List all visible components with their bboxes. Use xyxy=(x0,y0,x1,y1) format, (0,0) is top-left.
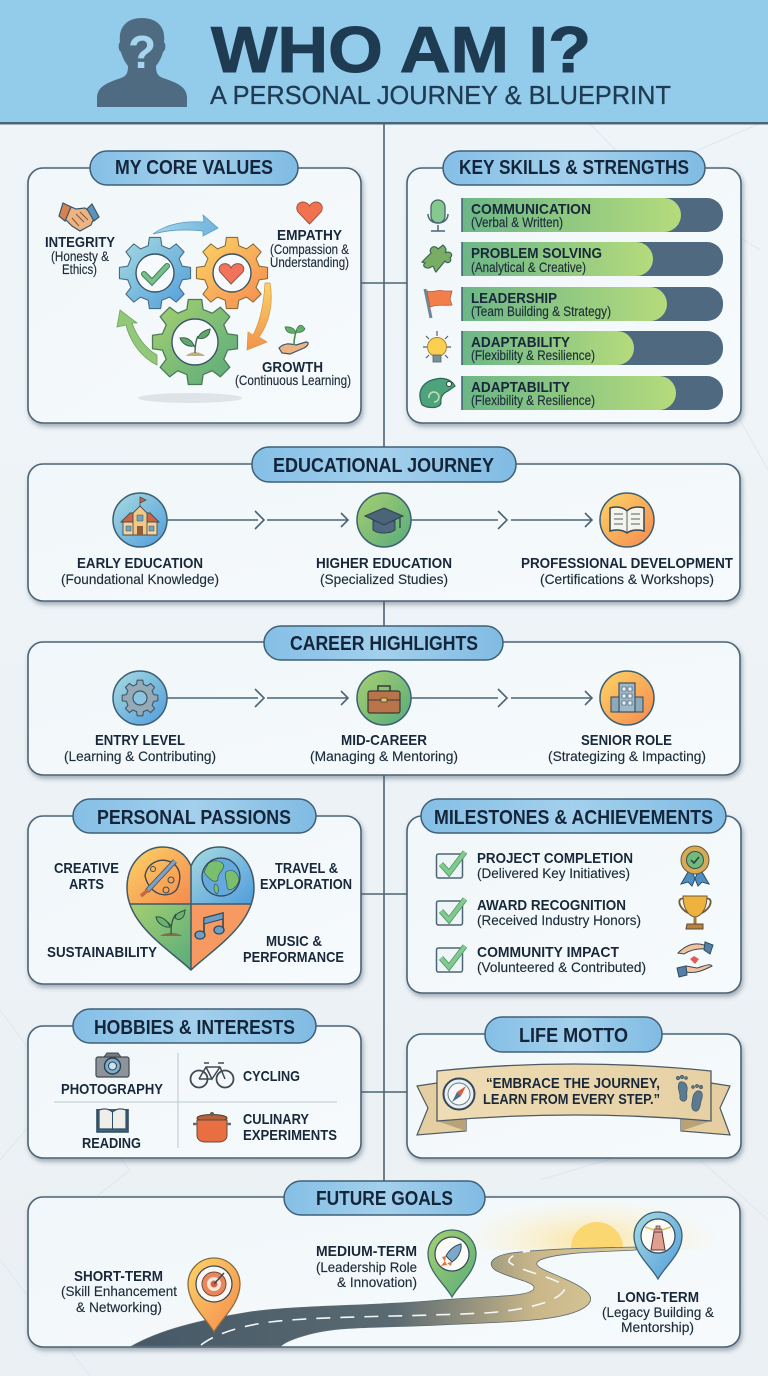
skill bar: communication: COMMUNICATION xyxy=(471,201,591,218)
label: music and performance: PERFORMANCE xyxy=(243,949,344,966)
icon: school xyxy=(113,493,167,547)
skill bar: adaptability xyxy=(462,331,723,365)
text: integrity: (Honesty & xyxy=(51,248,110,264)
text: empathy: (Compassion & xyxy=(270,241,350,257)
hobby: culinary experiments xyxy=(193,1111,337,1144)
text: higher education: HIGHER EDUCATION xyxy=(316,555,452,572)
heading: milestones: MILESTONES & ACHIEVEMENTS xyxy=(434,807,713,829)
gear: green with sprout xyxy=(153,300,237,384)
label: travel and exploration: TRAVEL & xyxy=(275,860,338,877)
icon: caring hands xyxy=(677,942,713,977)
label: music and performance xyxy=(243,933,344,966)
skill bar: problem solving xyxy=(462,242,723,276)
panel: personal passions xyxy=(28,799,361,984)
heading: hobbies: HOBBIES & INTERESTS xyxy=(94,1017,295,1039)
text: short term: & Networking) xyxy=(76,1299,162,1315)
milestone: award recognition: AWARD RECOGNITION xyxy=(477,897,626,914)
icon: trophy xyxy=(679,896,711,929)
banner: motto ribbon xyxy=(417,1064,730,1135)
milestone: community impact: (Volunteered & Contributed) xyxy=(477,959,646,975)
skill bar: adaptability second xyxy=(462,376,723,410)
text: higher education xyxy=(316,555,452,587)
label: travel and exploration xyxy=(260,860,352,893)
gear: blue with check xyxy=(119,237,191,309)
icon: compass xyxy=(444,1078,474,1110)
arrow: green cycle xyxy=(117,310,157,365)
heading: educational journey xyxy=(252,447,516,482)
text: growth: (Continuous Learning) xyxy=(235,372,351,388)
text: short term: (Skill Enhancement xyxy=(61,1283,177,1299)
hobby: photography xyxy=(61,1053,163,1098)
header banner xyxy=(0,0,768,124)
quote text: “EMBRACE THE JOURNEY, xyxy=(486,1075,660,1092)
panel: career highlights xyxy=(28,626,740,775)
text: mid-career xyxy=(310,732,458,764)
icon: flag xyxy=(425,289,452,318)
heading: life motto: LIFE MOTTO xyxy=(519,1025,628,1047)
text: empathy xyxy=(270,227,350,270)
panel: life motto xyxy=(407,1017,741,1158)
pin: short term target xyxy=(188,1258,240,1332)
skill bar: leadership: (Team Building & Strategy) xyxy=(471,303,611,319)
text: mid-career: MID-CAREER xyxy=(341,732,427,749)
label: travel and exploration: EXPLORATION xyxy=(260,876,352,893)
text: early education: (Foundational Knowledge) xyxy=(61,571,219,587)
subtitle: A PERSONAL JOURNEY & BLUEPRINT xyxy=(210,80,671,110)
label: creative arts xyxy=(54,860,119,893)
milestone: project completion: (Delivered Key Initiatives) xyxy=(477,865,630,881)
icon: office building xyxy=(600,671,654,725)
icon: sprout xyxy=(156,910,185,936)
heading: future goals xyxy=(284,1181,485,1215)
panel: key skills and strengths xyxy=(407,151,741,423)
panel: educational journey xyxy=(28,447,740,601)
icon: hand with plant xyxy=(279,325,308,354)
icon: handshake xyxy=(59,203,99,231)
milestone: community impact: COMMUNITY IMPACT xyxy=(477,944,619,961)
skill bar: adaptability: ADAPTABILITY xyxy=(471,334,570,351)
text: integrity: INTEGRITY xyxy=(45,234,115,251)
hobby: reading: READING xyxy=(82,1135,141,1152)
hobby: culinary experiments: EXPERIMENTS xyxy=(243,1127,337,1144)
heading: key skills: KEY SKILLS & STRENGTHS xyxy=(459,157,689,179)
arrows: education flow xyxy=(167,511,592,529)
text: professional development: (Certifications & Workshops) xyxy=(540,571,714,587)
panel: hobbies and interests xyxy=(28,1009,361,1158)
label: creative arts: ARTS xyxy=(69,876,104,893)
hobby: culinary experiments: CULINARY xyxy=(243,1111,309,1128)
text: entry level: ENTRY LEVEL xyxy=(95,732,185,749)
text: long term: (Legacy Building & xyxy=(602,1304,715,1320)
text: early education xyxy=(61,555,219,587)
heading: key skills xyxy=(443,151,705,185)
arrows: career flow xyxy=(167,689,592,707)
icon: graduation cap xyxy=(357,493,411,547)
milestone: community impact xyxy=(436,944,646,975)
icon: gear xyxy=(113,671,167,725)
text: short term: SHORT-TERM xyxy=(74,1268,163,1285)
icon: music notes xyxy=(195,913,224,939)
title: WHO AM I? xyxy=(211,13,591,86)
icon: medal xyxy=(681,846,709,886)
hobby: cycling: CYCLING xyxy=(243,1068,300,1085)
label: creative arts: CREATIVE xyxy=(54,860,119,877)
road xyxy=(132,1247,636,1346)
text: empathy: EMPATHY xyxy=(277,227,342,244)
skill bar: adaptability second: (Flexibility & Resilience) xyxy=(471,392,595,408)
text: growth xyxy=(235,359,351,388)
text: medium term: (Leadership Role xyxy=(316,1259,417,1275)
arrow: blue cycle xyxy=(153,215,218,236)
skill bar: leadership xyxy=(462,287,723,321)
quote text: LEARN FROM EVERY STEP.” xyxy=(483,1091,660,1108)
heading: career highlights: CAREER HIGHLIGHTS xyxy=(290,633,478,655)
text: long term: LONG-TERM xyxy=(617,1289,699,1306)
gear: orange with heart xyxy=(196,237,268,309)
heading: career highlights xyxy=(264,626,503,660)
arrow: orange cycle xyxy=(247,283,271,350)
icon: light bulb xyxy=(423,331,451,362)
heading: educational journey: EDUCATIONAL JOURNEY xyxy=(273,455,495,477)
text: growth: GROWTH xyxy=(262,359,323,376)
heading: my core values: MY CORE VALUES xyxy=(115,157,273,179)
icon: silhouette with question mark xyxy=(97,18,187,107)
text: entry level: (Learning & Contributing) xyxy=(64,748,216,764)
text: senior role: (Strategizing & Impacting) xyxy=(548,748,706,764)
heading: hobbies xyxy=(73,1009,316,1043)
label: sustainability: SUSTAINABILITY xyxy=(47,944,157,961)
text: early education: EARLY EDUCATION xyxy=(77,555,203,572)
text: integrity xyxy=(45,234,115,277)
heading: my core values xyxy=(90,151,298,185)
skill bar: communication: (Verbal & Written) xyxy=(471,214,563,230)
skill bar: problem solving: (Analytical & Creative) xyxy=(471,259,586,275)
text: long term: Mentorship) xyxy=(621,1319,694,1335)
label: music and performance: MUSIC & xyxy=(266,933,322,950)
central timeline connector xyxy=(361,124,407,1182)
icon: footprints xyxy=(676,1075,703,1111)
hobby: reading xyxy=(82,1109,141,1152)
heading: milestones xyxy=(421,799,726,833)
heading: personal passions: PERSONAL PASSIONS xyxy=(97,807,291,829)
text: integrity: Ethics) xyxy=(62,261,97,277)
milestone: award recognition: (Received Industry Honors) xyxy=(477,912,641,928)
text: professional development xyxy=(521,555,733,587)
panel: future goals xyxy=(28,1181,740,1347)
icon: open book xyxy=(600,493,654,547)
sun and glow xyxy=(480,1204,700,1250)
heart chart: four passions xyxy=(127,847,255,971)
icon: microphone xyxy=(428,200,448,231)
text: higher education: (Specialized Studies) xyxy=(320,571,448,587)
heading: personal passions xyxy=(73,799,316,833)
quote text xyxy=(483,1075,660,1108)
icon: puzzle piece xyxy=(422,245,452,272)
skill bar: leadership: LEADERSHIP xyxy=(471,290,557,307)
text: long term xyxy=(602,1289,715,1335)
text: senior role xyxy=(548,732,706,764)
pin: long term lighthouse xyxy=(634,1212,682,1279)
skill bar: problem solving: PROBLEM SOLVING xyxy=(471,245,602,262)
text: medium term xyxy=(316,1243,417,1290)
icon: palette xyxy=(141,860,180,896)
panel: milestones and achievements xyxy=(407,799,741,993)
milestone: project completion: PROJECT COMPLETION xyxy=(477,850,633,867)
text: medium term: & Innovation) xyxy=(337,1274,417,1290)
milestone: project completion xyxy=(436,850,633,881)
skill bar: adaptability second: ADAPTABILITY xyxy=(471,379,570,396)
text: entry level xyxy=(64,732,216,764)
heading: life motto xyxy=(485,1017,662,1052)
hobby: photography: PHOTOGRAPHY xyxy=(61,1081,163,1098)
skill bar: communication xyxy=(462,198,723,232)
panel: my core values xyxy=(28,151,361,423)
hobby: cycling xyxy=(190,1063,300,1088)
shadow under gears xyxy=(138,393,242,403)
heading: future goals: FUTURE GOALS xyxy=(316,1188,453,1210)
text: medium term: MEDIUM-TERM xyxy=(316,1243,417,1260)
icon: chameleon xyxy=(420,378,455,408)
skill bar: adaptability: (Flexibility & Resilience) xyxy=(471,347,595,363)
pin: medium term rocket xyxy=(428,1230,476,1297)
icon: heart xyxy=(297,202,322,224)
text: empathy: Understanding) xyxy=(270,254,349,270)
text: short term xyxy=(61,1268,177,1315)
text: senior role: SENIOR ROLE xyxy=(581,732,672,749)
text: mid-career: (Managing & Mentoring) xyxy=(310,748,458,764)
text: professional development: PROFESSIONAL DEVELOPMENT xyxy=(521,555,733,572)
icon: briefcase xyxy=(357,671,411,725)
icon: silhouette with question mark: ? xyxy=(128,26,156,78)
icon: globe xyxy=(202,858,240,896)
milestone: award recognition xyxy=(436,897,641,928)
